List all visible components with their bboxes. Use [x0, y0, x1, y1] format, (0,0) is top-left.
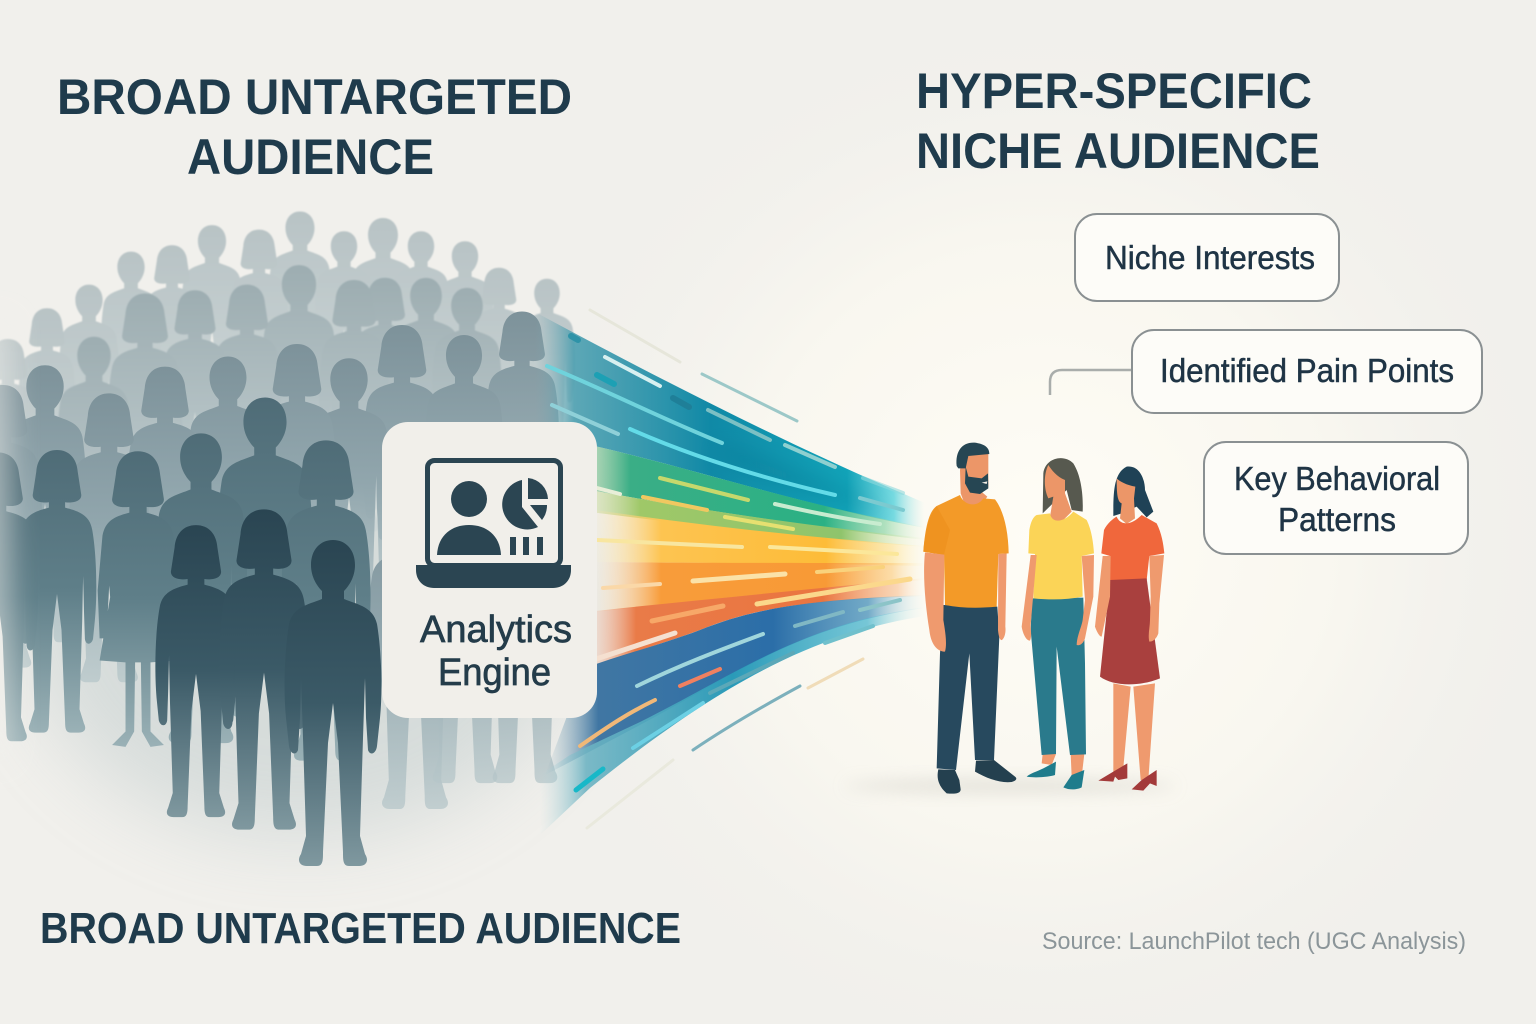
ribbon streak lines	[547, 310, 910, 828]
person: woman in yellow shirt	[1022, 458, 1094, 789]
callout: key behavioral patterns: Patterns	[1278, 501, 1396, 538]
source note: Source: LaunchPilot tech (UGC Analysis)	[1042, 928, 1466, 955]
ribbon bands	[535, 312, 925, 835]
caption: broad untargeted audience: BROAD UNTARGETED AUDIENCE	[40, 904, 681, 953]
callout: key behavioral patterns	[1204, 442, 1468, 554]
crowd fourth row	[0, 398, 371, 761]
callout: niche interests	[1075, 214, 1339, 301]
crowd of grey silhouettes	[0, 212, 575, 866]
heading: hyper-specific niche audience: HYPER-SPECIFIC	[916, 63, 1312, 119]
heading: hyper-specific niche audience: NICHE AUDIENCE	[916, 123, 1320, 179]
panel: analytics engine card	[382, 422, 597, 718]
connector: niche interests	[1000, 262, 1075, 264]
niche audience group	[923, 443, 1164, 794]
label: analytics engine	[420, 609, 572, 694]
heading: broad untargeted audience	[57, 69, 572, 185]
crowd third row	[0, 312, 571, 809]
connector: identified pain points	[1050, 370, 1132, 395]
label: analytics engine: Engine	[438, 652, 551, 694]
person: man in orange shirt	[923, 443, 1016, 794]
mist behind crowd	[20, 380, 580, 840]
heading: hyper-specific niche audience	[916, 63, 1320, 179]
label: analytics engine: Analytics	[420, 609, 572, 651]
person: woman in red-orange top and skirt	[1095, 467, 1164, 791]
callout: identified pain points	[1132, 330, 1482, 413]
connector: key behavioral patterns	[1170, 484, 1204, 486]
data stream ribbon	[535, 310, 925, 835]
crowd second row	[57, 265, 502, 584]
heading: broad untargeted audience: AUDIENCE	[187, 129, 434, 185]
callout: identified pain points: Identified Pain Points	[1160, 352, 1454, 389]
crowd back row	[0, 212, 575, 559]
callout: niche interests: Niche Interests	[1105, 239, 1315, 276]
crowd front row	[155, 509, 381, 866]
heading: broad untargeted audience: BROAD UNTARGETED	[57, 69, 572, 125]
icon: laptop with person and pie chart	[416, 460, 571, 588]
floor shadow	[845, 779, 1175, 793]
callout: key behavioral patterns: Key Behavioral	[1234, 460, 1440, 497]
